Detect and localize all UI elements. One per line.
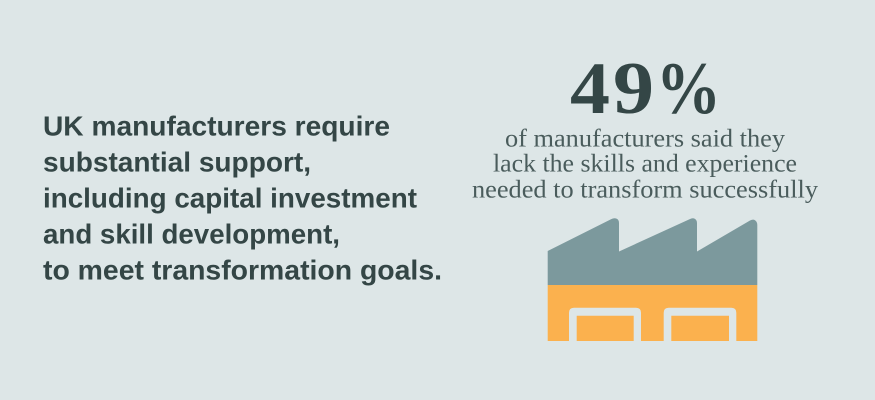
text block: main statement: substantial support,: [43, 146, 311, 177]
text block: main statement: including capital investment: [43, 182, 417, 213]
statistic: 49%: 4: [570, 48, 610, 130]
door right: [664, 308, 736, 341]
factory base: [548, 285, 757, 341]
text block: main statement: [43, 110, 442, 285]
text block: main statement: UK manufacturers require: [43, 110, 390, 141]
text block: statistic description: lack the skills and experience: [493, 149, 797, 178]
text block: statistic description: of manufacturers said they: [505, 124, 785, 153]
text block: statistic description: [472, 124, 818, 203]
statistic: 49%: 9: [613, 48, 654, 130]
text block: statistic description: needed to transform successfully: [472, 174, 818, 203]
icon: factory: [548, 218, 757, 341]
text block: main statement: to meet transformation goals.: [43, 254, 442, 285]
text block: main statement: and skill development,: [43, 218, 340, 249]
factory roof: [548, 218, 757, 285]
statistic: 49%: [570, 48, 721, 130]
statistic: 49%: %: [656, 48, 721, 130]
door left: [569, 308, 641, 341]
